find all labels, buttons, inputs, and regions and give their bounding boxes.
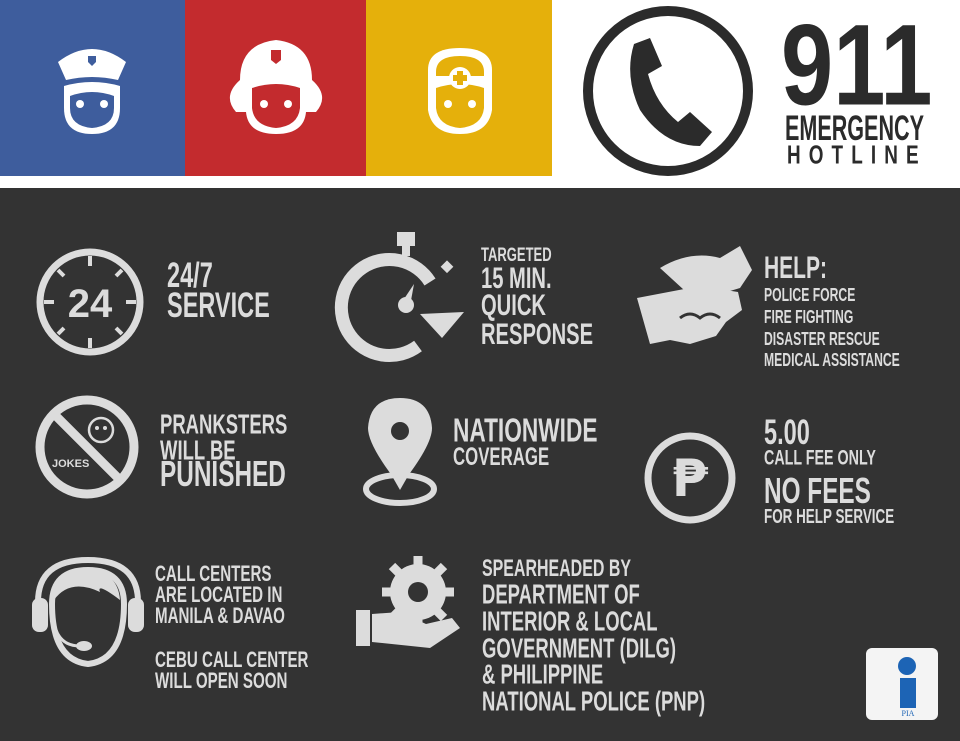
text: quick response: TARGETED — [481, 245, 552, 266]
icon: PIA logo — [866, 648, 938, 720]
icon: stopwatch — [341, 232, 464, 356]
text: & PHILIPPINE — [482, 658, 603, 690]
text: WILL BE — [160, 434, 236, 466]
icon: 24 clock — [40, 252, 140, 352]
icon: no jokes: JOKES — [52, 458, 89, 470]
text: CALL FEE ONLY — [764, 446, 876, 470]
panel: medic — [366, 0, 552, 176]
icon: peso: ₱ — [672, 449, 709, 509]
title: hotline: HOTLINE — [787, 141, 927, 170]
icon: location pin — [366, 398, 434, 503]
text: GOVERNMENT (DILG) — [482, 632, 676, 664]
icon: PIA logo: PIA — [902, 709, 915, 718]
panel: police — [0, 0, 185, 176]
icon: no jokes — [40, 400, 134, 494]
text: MEDICAL ASSISTANCE — [764, 351, 900, 371]
header band — [0, 0, 960, 188]
icon: peso — [648, 436, 732, 520]
icon: phone — [588, 11, 748, 171]
text: spearheaded: SPEARHEADED BY — [482, 556, 631, 582]
text: MANILA & DAVAO — [155, 603, 285, 628]
text: DEPARTMENT OF — [482, 578, 640, 610]
icon: handshake — [637, 246, 752, 344]
text: nationwide: NATIONWIDE — [453, 412, 597, 449]
text: 24/7 service: 24/7 — [167, 256, 213, 294]
title: 911: 911 — [781, 2, 932, 129]
text: POLICE FORCE — [764, 286, 855, 306]
text: FOR HELP SERVICE — [764, 507, 894, 528]
text: ARE LOCATED IN — [155, 582, 282, 607]
text: call centers: CALL CENTERS — [155, 561, 271, 586]
text: QUICK — [481, 288, 546, 322]
text: DISASTER RESCUE — [764, 330, 880, 350]
text: RESPONSE — [481, 318, 593, 351]
text: FIRE FIGHTING — [764, 308, 853, 328]
icon: 24 clock: 24 — [68, 282, 113, 326]
text: CEBU CALL CENTER — [155, 647, 308, 672]
title: emergency: EMERGENCY — [785, 108, 924, 147]
text: fees: 5.00 — [764, 412, 810, 451]
text: 15 MIN. — [481, 262, 552, 295]
text: NO FEES — [764, 472, 871, 512]
panel: firefighter — [185, 0, 366, 176]
text: pranksters: PRANKSTERS — [160, 408, 287, 440]
icon: headset agent — [32, 560, 144, 664]
text: INTERIOR & LOCAL — [482, 606, 658, 637]
text: COVERAGE — [453, 444, 549, 471]
text: SERVICE — [167, 286, 270, 324]
text: help: HELP: — [764, 250, 827, 286]
text: WILL OPEN SOON — [155, 668, 287, 693]
text: NATIONAL POLICE (PNP) — [482, 686, 705, 717]
icon: gear hand — [356, 556, 460, 648]
text: PUNISHED — [160, 454, 286, 494]
